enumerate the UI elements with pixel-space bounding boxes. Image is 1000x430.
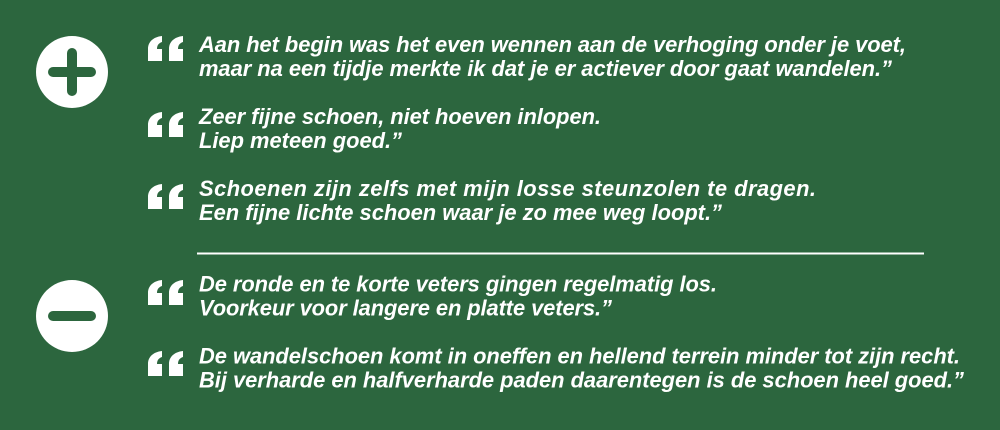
quote: positive 1 (148, 32, 906, 81)
quote: negative 2: Bij verharde en halfverharde paden daarentegen is de schoen heel goed.” (199, 368, 964, 392)
quote: positive 3: Schoenen zijn zelfs met mijn losse steunzolen te dragen. (199, 176, 816, 201)
quote: positive 3 (148, 176, 816, 225)
icon: plus (36, 36, 108, 108)
quote: negative 1 (148, 272, 717, 320)
quote: positive 2: Liep meteen goed.” (199, 128, 402, 153)
quote: negative 1: De ronde en te korte veters gingen regelmatig los. (199, 272, 717, 296)
quote: positive 1: maar na een tijdje merkte ik dat je er actiever door gaat wandelen.” (199, 56, 892, 81)
quote: positive 2 (148, 104, 601, 153)
divider (197, 252, 924, 254)
quote: negative 2 (148, 344, 964, 392)
quote: positive 1: Aan het begin was het even wennen aan de verhoging onder je voet, (198, 32, 906, 57)
quote: positive 3: Een fijne lichte schoen waar je zo mee weg loopt.” (199, 200, 722, 225)
quote: negative 1: Voorkeur voor langere en platte veters.” (199, 296, 612, 320)
icon: minus (36, 280, 108, 352)
quote: negative 2: De wandelschoen komt in oneffen en hellend terrein minder tot zijn recht. (199, 344, 960, 368)
quote: positive 2: Zeer fijne schoen, niet hoeven inlopen. (198, 104, 601, 129)
